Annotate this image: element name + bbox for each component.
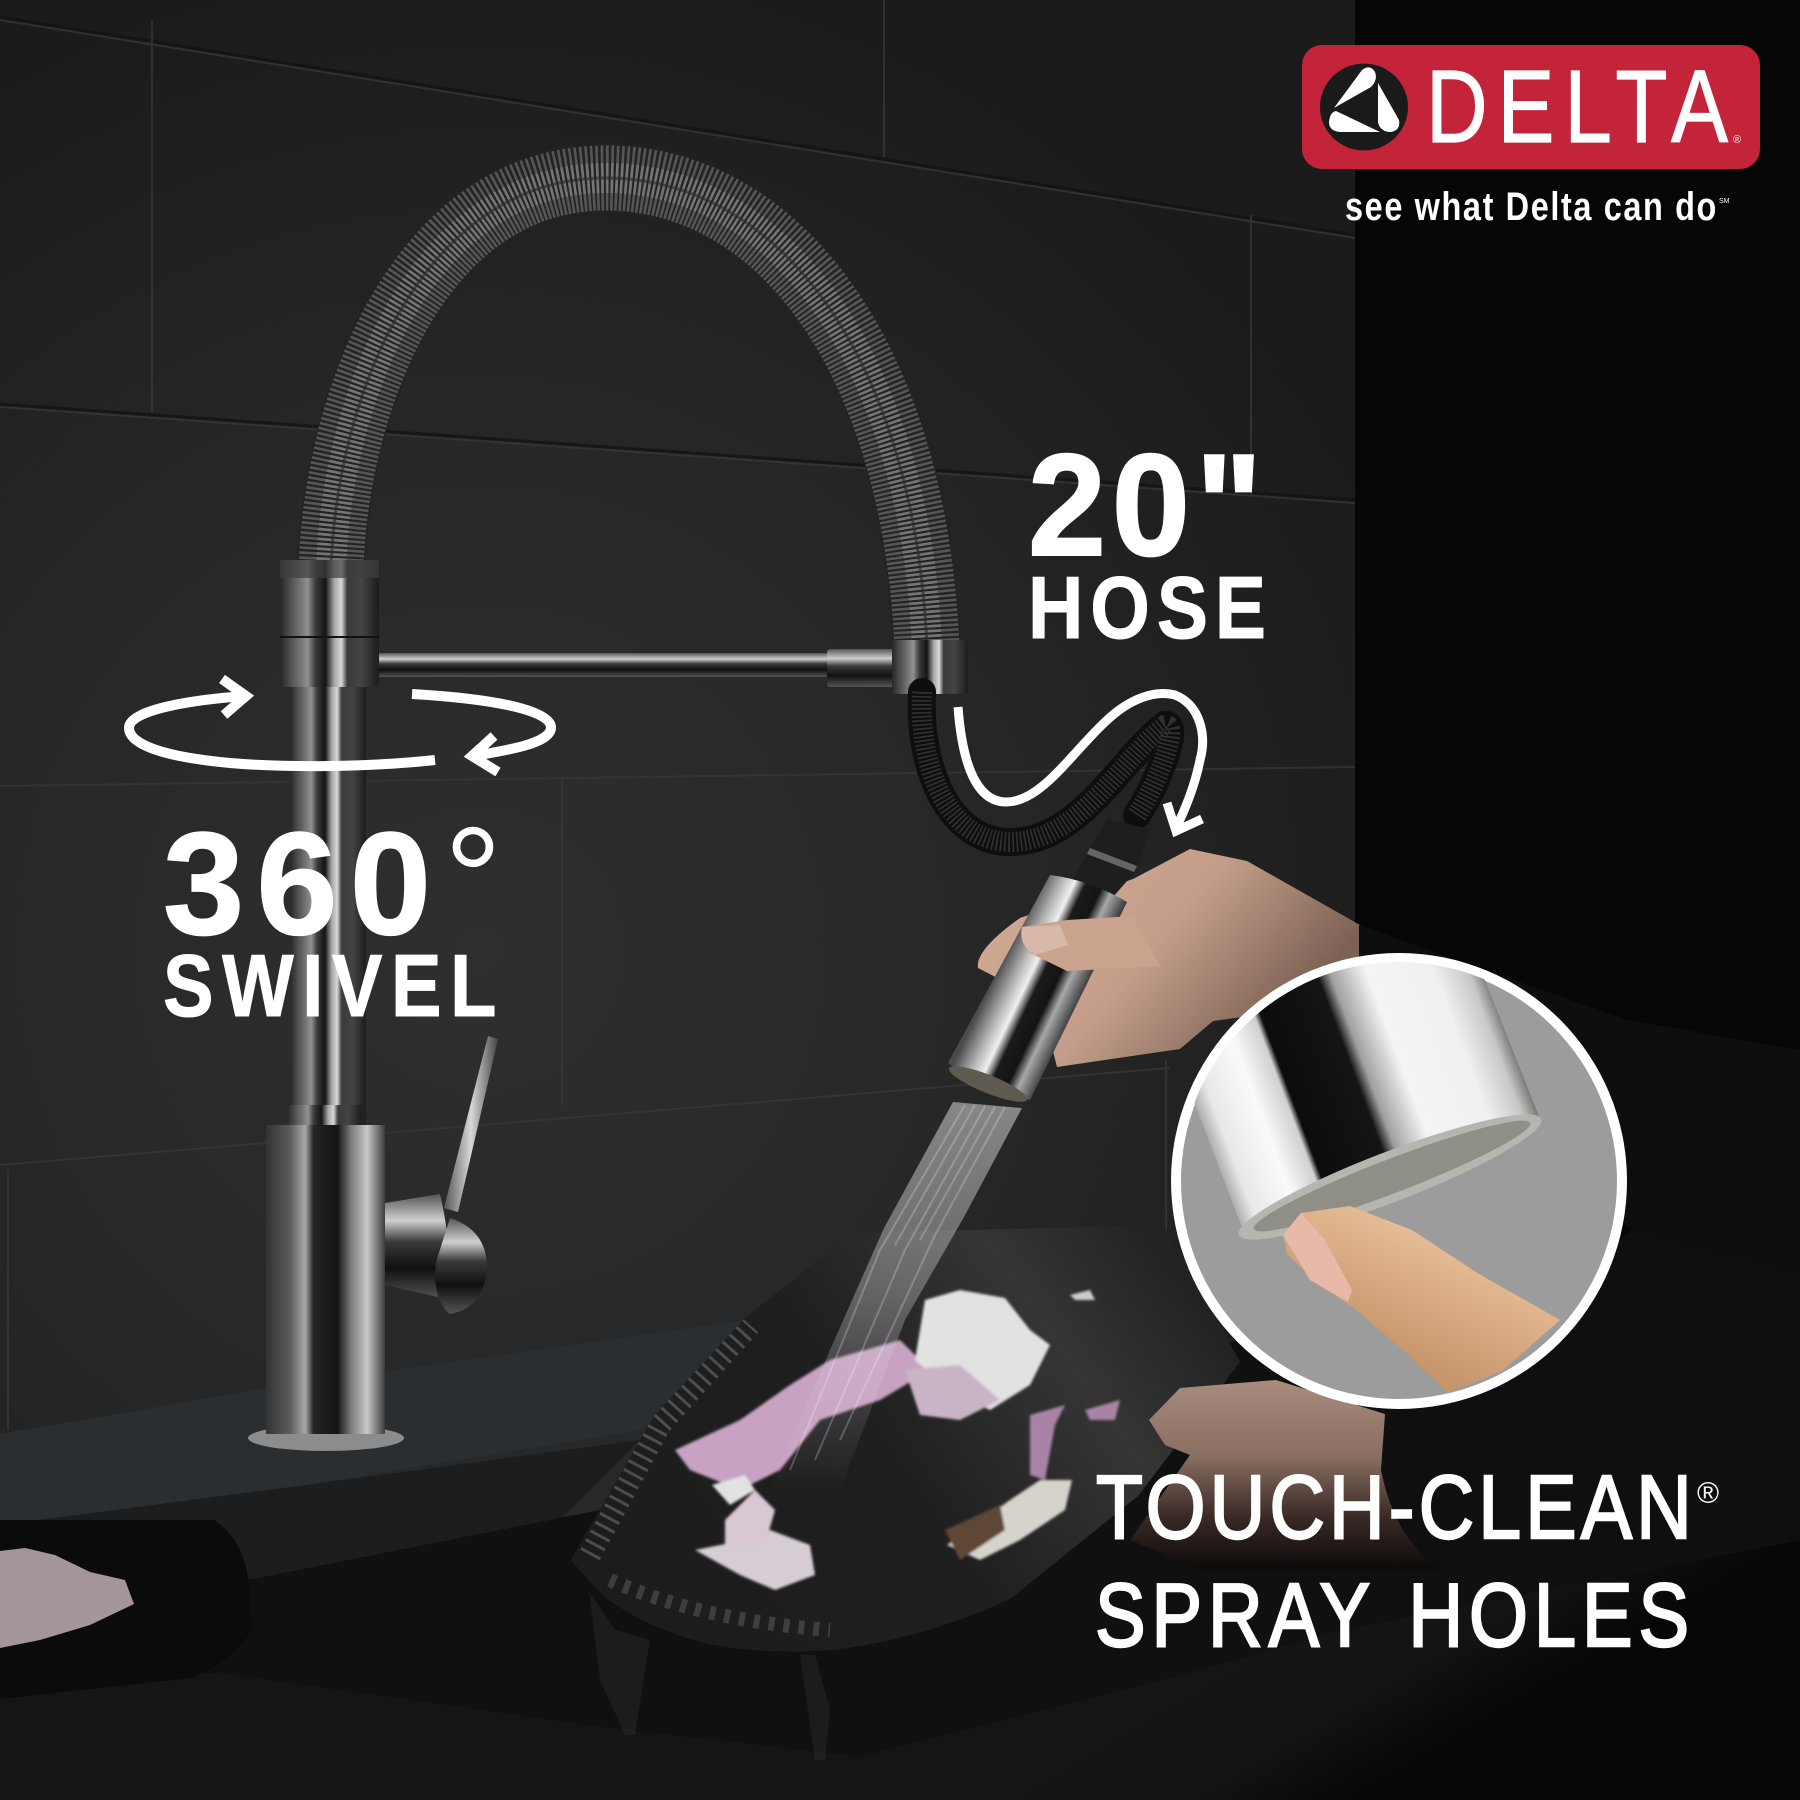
- pink trail far: [1085, 1400, 1120, 1420]
- base flange: [248, 1425, 404, 1451]
- sleeve: lower arm: [1381, 1230, 1800, 1569]
- base cylinder: [266, 1125, 385, 1434]
- frosting small: [712, 1475, 755, 1505]
- braided pull-down hose: [922, 692, 1170, 842]
- label: 360 swivel: [163, 797, 505, 1035]
- sink front lip: [0, 1540, 1800, 1800]
- degree sign: °: [444, 797, 502, 959]
- pink frosting streak: [675, 1340, 930, 1490]
- hand holding spray head: [978, 849, 1370, 1067]
- icon: swivel arrows: [129, 679, 551, 772]
- wall tile joints: [0, 0, 1355, 1430]
- number: 20": [1028, 424, 1268, 586]
- white residue: [1070, 1290, 1095, 1300]
- faucet: [248, 178, 968, 1451]
- large plate with food: [571, 1225, 1240, 1651]
- nozzle face: [946, 1060, 1030, 1108]
- circular callout: touch-clean detail: [1136, 950, 1627, 1409]
- emblem triangle petals: [1329, 67, 1399, 132]
- spout head fitting: [892, 640, 968, 694]
- wet sheen: [610, 1580, 830, 1630]
- service mark: SM: [1719, 198, 1730, 205]
- logo: Delta: [1302, 45, 1760, 229]
- counter back ledge: [0, 1250, 1180, 1600]
- sleeve: upper arm: [1359, 925, 1800, 1276]
- word: SWIVEL: [163, 936, 505, 1035]
- label: 20 inch hose: [1028, 424, 1273, 657]
- sink interior: [0, 1250, 1800, 1757]
- frosting right: [947, 1480, 1072, 1560]
- heading line two: SPRAY HOLES: [1095, 1566, 1695, 1666]
- index finger over head: [1022, 916, 1160, 971]
- lever handle: [444, 1036, 498, 1212]
- wordmark: DELTA: [1426, 49, 1738, 164]
- water drips: [589, 1591, 830, 1760]
- water spray: [770, 1102, 1022, 1490]
- crumbs: [945, 1505, 1005, 1560]
- white frosting top: [915, 1290, 1050, 1410]
- frosting middle: [725, 1490, 775, 1545]
- second hand holding plate: [1130, 1380, 1441, 1569]
- coiled spring spout: [331, 178, 927, 648]
- word: HOSE: [1028, 558, 1273, 657]
- handle hub: [385, 1194, 450, 1300]
- panel: dark right wall: [1355, 0, 1800, 1300]
- collar: [280, 560, 379, 687]
- zoomed spray face: [1238, 1114, 1542, 1240]
- small plate on counter: [0, 1520, 252, 1699]
- tagline: see what Delta can do: [1345, 185, 1718, 229]
- frosting under flow: [905, 1365, 1000, 1420]
- handle end cap: [435, 1218, 487, 1314]
- bar fitting: [827, 649, 901, 687]
- water strands: [790, 1105, 1005, 1470]
- food residue: [0, 1548, 134, 1648]
- red badge: [1302, 45, 1760, 169]
- fingernail detail: [1283, 1213, 1352, 1302]
- counter top surface: [0, 1300, 860, 1525]
- pink trail right: [1030, 1405, 1065, 1480]
- zoomed chrome spray head: [1194, 962, 1539, 1226]
- nut ring: [1087, 848, 1137, 872]
- countertop: [0, 1250, 1800, 1800]
- ring above base: [287, 1105, 362, 1127]
- column: [290, 680, 366, 1125]
- horizontal support bar: [379, 653, 829, 677]
- water droplets along plate edge: [590, 1325, 750, 1555]
- heading line one: TOUCH-CLEAN: [1096, 1458, 1696, 1558]
- registered mark: ®: [1697, 1477, 1719, 1510]
- icon: hose arrow: [958, 694, 1203, 831]
- fingernail: [1021, 925, 1068, 955]
- spray head: [946, 819, 1150, 1108]
- white frosting lower: [695, 1530, 815, 1590]
- fingertip: [1283, 1206, 1560, 1393]
- number: 360: [163, 802, 439, 965]
- chrome body: [948, 875, 1127, 1100]
- counter front edge: [0, 1440, 640, 1610]
- registered mark: ®: [1733, 134, 1741, 146]
- label: touch-clean spray holes: [1095, 1458, 1719, 1666]
- emblem circle: [1320, 64, 1408, 150]
- neck nut: [1073, 819, 1150, 898]
